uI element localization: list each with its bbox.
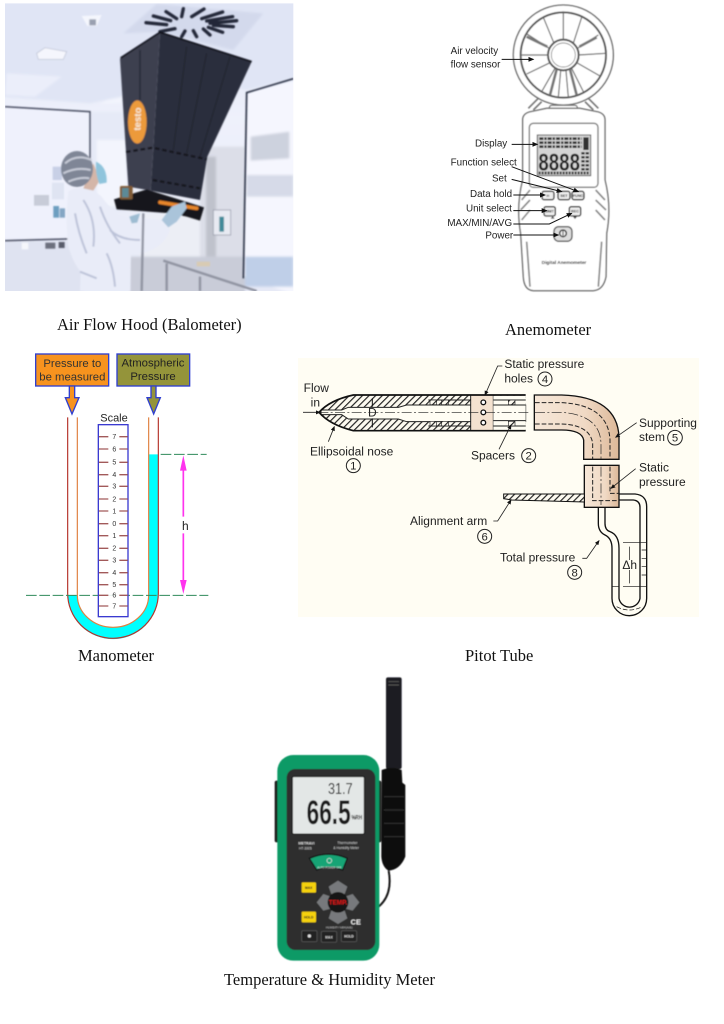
body <box>519 108 609 291</box>
testo logo <box>128 100 147 144</box>
diagram: pitot tube: 6 <box>482 531 488 543</box>
probe and cable <box>376 677 405 909</box>
direction pad <box>329 881 347 894</box>
anemometer callouts: Function select <box>451 158 517 169</box>
frames <box>5 107 90 241</box>
lower stem <box>584 465 619 507</box>
U tube walls <box>68 417 158 638</box>
diagram: pitot tube <box>298 357 699 617</box>
pitot labels: stem <box>639 430 665 444</box>
elbow <box>534 395 619 459</box>
scale: 2 <box>112 496 116 503</box>
photo: air flow hood in use: testo <box>132 107 144 131</box>
leader arrows <box>303 366 637 558</box>
table <box>142 213 257 291</box>
pitot labels: Flow <box>304 381 329 395</box>
pitot labels: pressure <box>639 475 686 489</box>
pitot labels: Static pressure <box>504 357 585 371</box>
scale: 7 <box>112 434 116 441</box>
diagram: anemometer: SET <box>560 194 568 198</box>
fluid column <box>68 454 158 639</box>
pitot labels: Static <box>639 460 669 474</box>
hood base tray <box>114 189 204 221</box>
scale: 3 <box>112 558 116 565</box>
caption: manometer: Manometer <box>78 646 155 665</box>
hood <box>120 32 160 191</box>
scale: 6 <box>112 593 116 600</box>
pitot labels <box>304 357 697 572</box>
atmospheric pressure box: Atmospheric <box>122 357 185 369</box>
anemometer callouts: MAX/MIN/AVG <box>447 218 512 229</box>
pitot labels: Spacers <box>471 448 515 462</box>
diagram: manometer <box>26 354 208 639</box>
photo: temperature and humidity meter: %RH <box>351 815 362 821</box>
photo: temperature and humidity meter: HOLD <box>344 935 354 939</box>
diagram: anemometer: FUNC <box>573 194 583 198</box>
diagram: anemometer: H <box>547 194 550 198</box>
anemometer callouts <box>447 46 578 242</box>
scale: 1 <box>112 508 116 515</box>
probe body <box>318 395 528 431</box>
atmospheric pressure box: Pressure <box>130 371 176 383</box>
photo: temperature and humidity meter: 31.7 <box>328 781 353 798</box>
anemometer callouts: Air velocity <box>451 46 498 57</box>
photo: air flow hood in use <box>0 0 300 297</box>
left wall panel <box>0 107 90 240</box>
anemometer callouts: Set <box>492 173 507 184</box>
wall items <box>53 167 62 180</box>
pitot labels: holes <box>504 372 533 386</box>
photo: temperature and humidity meter: MAX <box>325 935 333 939</box>
pitot labels: Total pressure <box>500 550 576 564</box>
diagram: anemometer <box>447 5 613 291</box>
scale: 2 <box>112 546 116 553</box>
probe body: D <box>368 406 377 420</box>
brand text: Thermometer <box>337 841 358 845</box>
anemometer callouts: Unit select <box>466 203 512 214</box>
scale: 4 <box>112 472 116 479</box>
pitot labels: Δh <box>622 558 637 572</box>
photo: temperature and humidity meter <box>275 677 405 961</box>
reference lines <box>26 594 208 597</box>
brand text: METRAVI <box>298 842 315 846</box>
diagram: anemometer: REC <box>571 210 579 214</box>
brand text <box>298 841 360 850</box>
caption: temperature and humidity meter: Temperature & Humidity Meter <box>224 970 435 989</box>
pitot labels: in <box>311 395 320 409</box>
ceiling fixtures <box>82 15 102 26</box>
model name: Digital Anemometer <box>542 260 587 265</box>
scale: 0 <box>112 521 116 528</box>
pitot labels: Alignment arm <box>410 514 487 528</box>
scale: 6 <box>112 446 116 453</box>
scale: Scale <box>100 413 128 425</box>
photo: temperature and humidity meter: AUTO POWER OFF <box>317 865 342 869</box>
diagram: pitot tube: 2 <box>526 451 532 463</box>
caption: anemometer: Anemometer <box>505 320 592 339</box>
scale: 5 <box>112 582 116 589</box>
lower centre cabinets <box>200 146 244 256</box>
power button <box>309 854 347 870</box>
height arrow h <box>180 455 189 594</box>
caption: pitot tube: Pitot Tube <box>465 646 533 665</box>
lower buttons <box>302 931 357 942</box>
photo: temperature and humidity meter: CE <box>351 917 361 926</box>
anemometer callouts: Data hold <box>470 189 512 200</box>
side grips <box>275 781 281 842</box>
diagram: anemometer: UNIT <box>545 210 555 214</box>
diffuser slats <box>146 9 237 37</box>
atmospheric pressure box <box>117 354 190 414</box>
pressure to be measured box: be measured <box>39 372 105 384</box>
scale: 4 <box>112 570 116 577</box>
photo: temperature and humidity meter: 66.5 <box>307 794 351 832</box>
LCD <box>292 777 364 834</box>
alignment arm <box>504 494 584 502</box>
anemometer callouts: Display <box>475 139 507 150</box>
ceiling <box>20 72 293 102</box>
scale <box>98 413 128 617</box>
pitot labels: Ellipsoidal nose <box>310 444 394 458</box>
brand text: & Humidity Meter <box>333 846 360 850</box>
diagram: anemometer: 8888 <box>538 149 580 176</box>
right cabinet <box>244 82 294 291</box>
caption: air flow hood: Air Flow Hood (Balometer) <box>57 315 242 334</box>
LCD <box>537 135 591 176</box>
number badges <box>346 372 682 579</box>
scale: 3 <box>112 484 116 491</box>
diagram: pitot tube: 8 <box>572 567 578 579</box>
dark face <box>287 769 375 950</box>
yellow buttons <box>302 882 316 893</box>
diagram: pitot tube: 4 <box>542 374 548 386</box>
person <box>66 189 131 290</box>
scale: 1 <box>112 533 116 540</box>
sensor head <box>513 5 613 105</box>
green housing <box>277 755 379 961</box>
anemometer callouts: Power <box>485 231 514 242</box>
diagram: pitot tube: 1 <box>350 461 356 473</box>
pressure to be measured box <box>36 354 109 414</box>
screen frame <box>529 123 598 187</box>
brand text: HT-3005 <box>299 846 312 850</box>
photo: temperature and humidity meter: TEMP. <box>329 900 347 907</box>
photo: temperature and humidity meter: HUMIDITY %RH(AVE) <box>326 925 353 929</box>
pressure to be measured box: Pressure to <box>43 358 101 370</box>
pitot labels: Supporting <box>639 416 697 430</box>
photo: temperature and humidity meter: HOLD <box>304 915 314 919</box>
scale: 7 <box>112 603 116 610</box>
scale: 5 <box>112 460 116 467</box>
buttons <box>542 191 584 241</box>
photo: temperature and humidity meter: MAX <box>305 886 313 890</box>
height arrow h: h <box>182 519 189 533</box>
U-tube gauge <box>598 494 647 616</box>
anemometer callouts: flow sensor <box>451 59 501 70</box>
diagram: pitot tube: 5 <box>672 433 678 445</box>
neck <box>528 98 598 110</box>
